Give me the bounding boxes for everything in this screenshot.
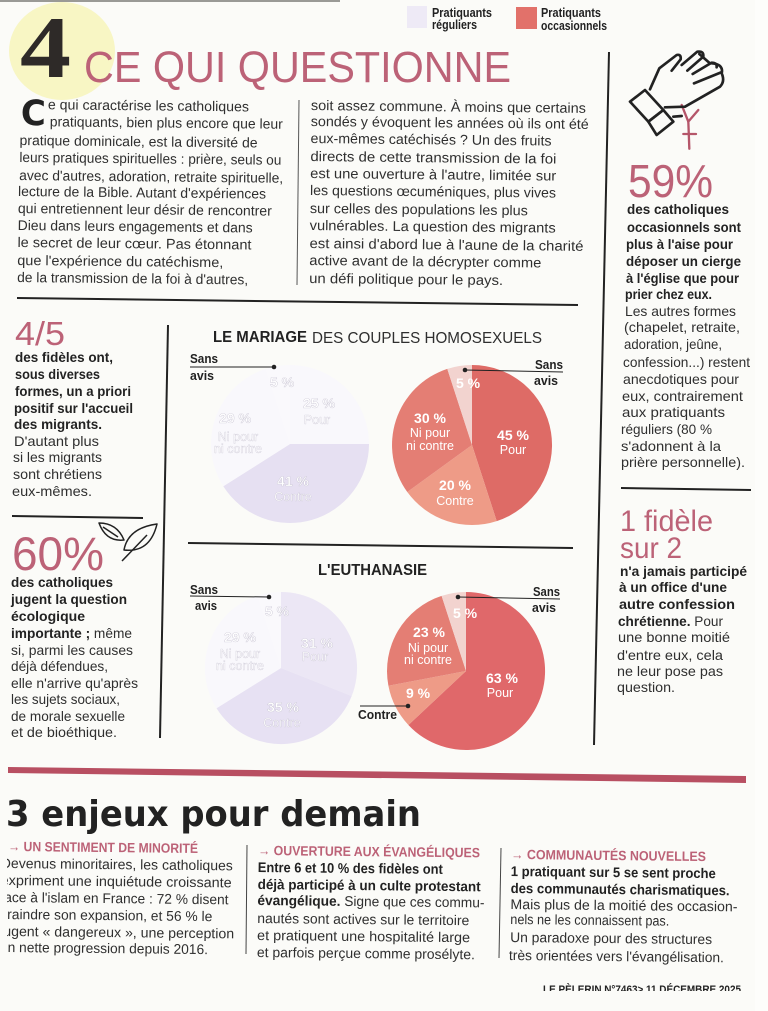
pie chart: occasionnels, mariage: 20 % [439,477,472,493]
column text: en nette progression depuis 2016. [0,939,208,957]
stat text: de morale sexuelle [11,708,125,724]
column text: déjà participé à un culte protestant [258,876,481,894]
stat text: sont chrétiens [13,466,102,482]
legend [407,5,607,33]
callout: sans avis, occasionnels: avis [532,600,556,615]
legend label: pratiquants occasionnels: Pratiquants [541,5,601,20]
column text: évangélique. Signe que ces commu- [257,892,485,910]
pie chart: réguliers, euthanasie: Ni pour [220,647,260,661]
stat number 4/5: 4/5 [15,315,65,352]
stat text: si les migrants [13,449,102,465]
pie chart: occasionnels, mariage: ni contre [406,439,454,453]
stat text: écologique [11,608,85,624]
stat text: D'autant plus [14,433,99,449]
callout: sans avis, occasionnels [463,357,563,388]
pie chart: occasionnels, mariage: 30 % [414,410,447,426]
callout: sans avis, occasionnels: avis [534,373,558,388]
stat text: elle n'arrive qu'après [11,675,138,691]
intro text column 1: de la transmission de la foi à d'autres, [17,269,248,287]
drop cap: C [21,94,46,134]
pie chart: réguliers, mariage: 29 % [219,410,252,426]
intro text column 2 [309,97,589,289]
column text: Devenus minoritaires, les catholiques [1,855,233,873]
callout: sans avis, réguliers [190,582,271,613]
pie chart: réguliers, mariage: 41 % [277,473,310,489]
column text: Entre 6 et 10 % des fidèles ont [258,859,443,877]
stat text: les sujets sociaux, [11,691,120,707]
callout: sans avis, réguliers [190,351,276,383]
stat panel: 1 fidèle sur 2 [617,505,747,695]
chart panel: l'euthanasie [190,562,560,750]
pie chart: occasionnels, euthanasie: 9 % [406,685,431,701]
column text [0,855,235,957]
pie chart: réguliers, euthanasie: 31 % [301,635,334,651]
pie chart: réguliers, mariage: Contre [274,490,312,504]
pie chart: occasionnels, mariage: Contre [436,494,474,508]
pie chart: réguliers, mariage: Pour [304,413,330,427]
column text: expriment une inquiétude croissante [1,872,232,890]
intro text column 1: pratique dominicale, est la diversité de [19,132,258,151]
stat text: déposer un cierge [626,253,741,269]
pie chart: occasionnels, euthanasie: Ni pour [408,641,448,655]
legend swatch: pratiquants occasionnels [516,7,537,29]
intro text column 1: le secret de leur cœur. Pas étonnant [17,234,252,252]
pie chart: occasionnels, mariage [392,365,552,525]
stat text: aux pratiquants [622,404,725,420]
stat heading [620,505,713,565]
stat heading: sur 2 [620,532,682,565]
callout: sans avis, occasionnels: Sans [533,584,560,599]
intro text column 2: eux-mêmes catéchisés ? Un des fruits [311,130,552,149]
column text: et pratiquent une hospitalité large [257,927,470,945]
stat text: une bonne moitié [618,629,730,645]
stat heading: 1 fidèle [620,505,713,538]
stat text: autre confession [619,596,735,612]
callout: sans avis, réguliers: avis [190,368,214,383]
stat text: à un office d'une [619,579,727,595]
intro text column 2: directs de cette transmission de la foi [310,148,556,167]
title: CE QUI QUESTIONNE [84,43,511,92]
stat text [621,201,750,470]
column heading: → COMMUNAUTÉS NOUVELLES [511,847,706,864]
legend label: pratiquants réguliers: Pratiquants [432,5,492,20]
section heading: 3 enjeux pour demain: 3 enjeux pour demain [6,794,421,835]
pie chart: réguliers, euthanasie: Contre [263,716,301,730]
section number: 4 [20,0,71,97]
legend label: pratiquants occasionnels: occasionnels [541,18,607,33]
stat text: Les autres formes [625,303,736,319]
callout: sans avis, réguliers: avis [195,598,217,613]
pie chart: occasionnels, mariage: Pour [500,443,526,457]
stat panel: 60% [10,523,157,740]
intro text column 2: sondés y évoquent les années où ils ont été [311,113,589,132]
column: communautés nouvelles [509,847,738,965]
stat text: plus à l'aise pour [626,236,734,252]
intro text column 2: soit assez commune. À moins que certains [311,97,586,116]
yellow circle behind number [9,2,115,100]
intro text column 1: Dieu dans leurs engagements et dans [18,217,253,235]
stat text: et de bioéthique. [11,724,117,740]
stat text: jugent la question [10,591,127,607]
legend label: pratiquants réguliers: réguliers [432,17,477,32]
stat text: positif sur l'accueil [14,400,133,416]
intro text column 2: les questions œcuméniques, plus vives [310,182,556,201]
stat text: occasionnels sont [627,219,741,235]
stat text: importante ; même [11,625,132,641]
stat text: d'entre eux, cela [617,647,723,663]
stat text: (chapelet, retraite, [624,319,740,335]
pie chart: occasionnels, euthanasie [387,592,545,750]
stat text: ne leur pose pas [617,663,723,679]
red divider band [8,767,746,783]
column: un sentiment de minorité [0,839,235,957]
pie chart: occasionnels, euthanasie: Pour [487,686,513,700]
stat text: adoration, jeûne, [624,336,722,352]
column text: très orientées vers l'évangélisation. [509,947,724,965]
stat text: eux, contrairement [622,388,743,404]
stat text: sous diverses [15,366,100,382]
pie chart: réguliers, euthanasie: ni contre [216,659,264,673]
intro text column 2: est une ouverture à l'autre, limitée sur [310,165,557,184]
stat text: des fidèles ont, [15,349,113,365]
icon: praying hands with rosary [630,52,723,149]
legend label: pratiquants réguliers [432,5,492,32]
pie chart: occasionnels, mariage: Ni pour [410,426,450,440]
legend label: pratiquants occasionnels [541,5,607,33]
stat text: des catholiques [11,574,113,590]
stat text: chrétienne. Pour [618,613,723,629]
stat text: question. [617,679,675,695]
stat text: prière personnelle). [621,454,745,470]
stat text: si, parmi les causes [11,642,133,658]
stat text: n'a jamais participé [620,563,747,579]
stat text [12,349,133,499]
column text: Un paradoxe pour des structures [510,929,712,947]
stat text [10,574,138,740]
stat text: déjà défendues, [11,658,108,674]
icon: leaves [99,523,157,561]
pie chart: occasionnels, mariage: 5 % [456,375,481,391]
pie chart: réguliers, mariage [211,365,369,523]
intro text column 1: avec d'autres, adoration, retraite spirituelle, [19,167,283,186]
column text: nautés sont actives sur le territoire [257,910,470,928]
stat text: réguliers (80 % [621,421,712,437]
pie chart: réguliers, euthanasie: Pour [302,650,328,664]
column text: et parfois perçue comme prosélyte. [257,944,475,962]
stat text: à l'église que pour [626,270,740,286]
intro text column 2: est ainsi d'abord lue à l'aune de la charité [309,235,584,254]
stat panel: 4/5 [12,315,133,499]
chart heading [213,329,542,347]
pie chart: réguliers, mariage: 25 % [303,395,336,411]
callout: contre: Contre [358,707,397,722]
column text [257,859,485,962]
column heading: → OUVERTURE AUX ÉVANGÉLIQUES [258,843,480,860]
pie chart: occasionnels, euthanasie: 5 % [453,605,478,621]
stat text: des catholiques [627,201,729,217]
intro text column 2: active avant de la décrypter comme [309,252,542,270]
column text: 1 pratiquant sur 5 se sent proche [511,863,716,881]
pie chart: réguliers, euthanasie: 35 % [267,699,300,715]
intro text column 1: qui entretiennent leur désir de rencontrer [18,200,272,219]
intro text column 1: e qui caractérise les catholiques [48,96,249,114]
intro text column 1: pratiquants, bien plus encore que leur [50,113,283,132]
column heading: → UN SENTIMENT DE MINORITÉ [8,839,198,856]
stat text: s'adonnent à la [621,438,721,454]
stat number 59%: 59% [628,155,713,207]
stat text: anecdotiques pour [623,371,739,387]
stat text: eux-mêmes. [12,483,92,499]
intro text column 1: lecture de la Bible. Autant d'expériences [18,183,266,202]
callout: sans avis, occasionnels [456,584,560,615]
chart heading: L'EUTHANASIE [318,562,427,579]
callout: sans avis, occasionnels: Sans [535,357,563,372]
column text [509,863,738,965]
column text: nels ne les connaissent pas. [510,911,669,929]
column text: des communautés charismatiques. [511,880,730,898]
pie chart: occasionnels, euthanasie: 23 % [413,624,446,640]
column text: Mais plus de la moitié des occasion- [510,896,738,914]
pie chart: occasionnels, mariage: 45 % [497,427,530,443]
stat number 60%: 60% [12,527,104,580]
pie chart: occasionnels, euthanasie: 63 % [486,670,519,686]
stat text [617,563,747,695]
pie chart: réguliers, mariage: Ni pour [218,430,258,444]
intro text column 2: vulnérables. La question des migrants [310,217,556,236]
column text: face à l'islam en France : 72 % disent [0,889,229,907]
column: ouverture aux évangéliques [257,843,485,962]
pie chart: réguliers, euthanasie: 29 % [224,629,257,645]
intro text column 2: un défi politique pour le pays. [309,270,503,288]
stat text: confession...) restent [623,354,750,370]
column text: craindre son expansion, et 56 % le [0,906,213,924]
chart heading: DES COUPLES HOMOSEXUELS [312,330,542,347]
callout: sans avis, réguliers: Sans [190,582,218,597]
intro text column 1 [17,94,284,288]
pie chart: réguliers, euthanasie [205,592,357,744]
column text: jugent « dangereux », une perception [0,923,234,941]
stat text: des migrants. [14,416,102,432]
callout: contre [358,704,410,722]
stat panel: 59% [621,155,750,470]
intro text column 2: sur celles des populations les plus [310,200,528,218]
pie chart: réguliers, mariage: ni contre [214,442,262,456]
chart heading: LE MARIAGE [213,329,307,346]
stat text: prier chez eux. [625,286,712,302]
legend swatch: pratiquants réguliers [407,6,427,28]
intro text column 1: que l'expérience du catéchisme, [17,252,223,270]
intro text column 1: leurs pratiques spirituelles : prière, seuls ou [19,149,281,168]
footer credit: LE PÈLERIN N°7463> 11 DÉCEMBRE 2025 [543,983,741,996]
pie chart: réguliers, euthanasie: 5 % [265,603,290,619]
stat text: formes, un a priori [15,383,131,399]
pie chart: réguliers, mariage: 5 % [270,374,295,390]
callout: sans avis, réguliers: Sans [190,351,218,366]
chart panel: le mariage des couples homosexuels [190,329,563,525]
pie chart: occasionnels, euthanasie: ni contre [404,653,452,667]
